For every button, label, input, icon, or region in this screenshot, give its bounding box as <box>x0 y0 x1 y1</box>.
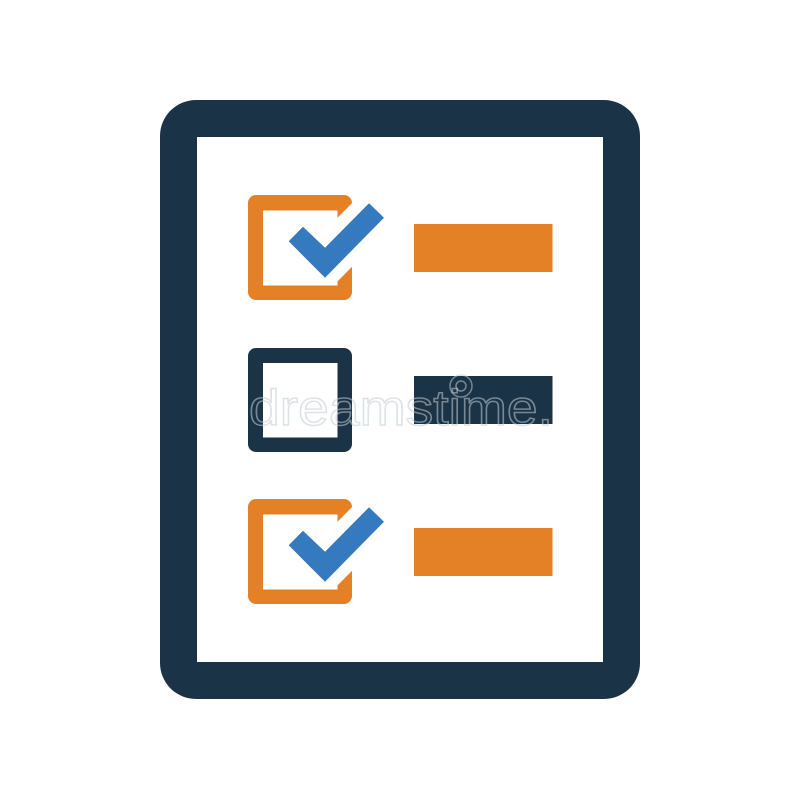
watermark: dreamstime. <box>249 380 553 436</box>
icon: checked box 1 <box>248 190 384 300</box>
bar: item 1 label <box>414 224 552 272</box>
panel: clipboard document frame <box>160 100 640 699</box>
icon: checked box 3 <box>248 494 384 604</box>
icon: empty box 2 <box>248 348 352 452</box>
bar: item 2 label <box>414 376 552 424</box>
bar: item 3 label <box>414 528 552 576</box>
